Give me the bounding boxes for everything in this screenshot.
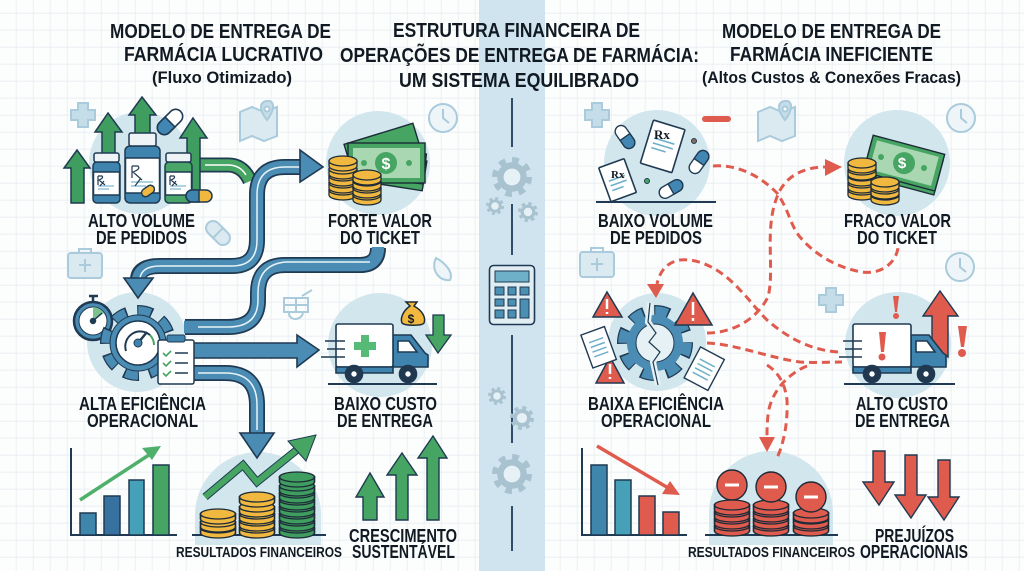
- icon: calculator: [490, 266, 534, 324]
- left decorative icons: [68, 101, 457, 319]
- label: prejuizos: OPERACIONAIS: [860, 542, 968, 562]
- icon: minus: [702, 116, 731, 122]
- title: right: [702, 21, 961, 87]
- icon: red up arrow: [923, 291, 958, 357]
- arrow: ticket to efficiency: [184, 247, 378, 327]
- arrowheads: [647, 159, 842, 452]
- title: right: FARMÁCIA INEFICIENTE: [730, 43, 933, 66]
- label: crescimento: SUSTENTÁVEL: [352, 541, 455, 562]
- right decorative icons: [580, 101, 975, 312]
- label: fraco valor: FRACO VALOR: [844, 211, 951, 231]
- icon: delivery truck: [321, 324, 437, 384]
- label: alto volume: ALTO VOLUME: [88, 211, 195, 231]
- light circles right: [604, 110, 951, 545]
- chart: falling bars: [582, 446, 687, 535]
- icon: exclamation marks: [878, 296, 967, 360]
- label: prejuizos: [860, 525, 968, 562]
- label: alta eficiencia: [79, 393, 206, 431]
- label: alto custo: ALTO CUSTO: [856, 394, 948, 414]
- title: center: [340, 20, 699, 92]
- arrow: green flow: [198, 165, 250, 181]
- icon: prescriptions and pills: [596, 120, 716, 202]
- icon: documents: [581, 327, 724, 390]
- icon: gears top: [488, 161, 536, 220]
- title: center: ESTRUTURA FINANCEIRA DE: [393, 20, 640, 42]
- label: alta eficiencia: ALTA EFICIÊNCIA: [79, 393, 206, 414]
- label: alto custo: DE ENTREGA: [855, 411, 950, 431]
- warning marks: [607, 299, 693, 379]
- label: forte valor: DO TICKET: [340, 228, 420, 248]
- label: fraco valor: DO TICKET: [857, 228, 937, 248]
- icon: growth arrows: [356, 436, 447, 520]
- icon: growth arrows behind bottles: [64, 97, 207, 203]
- title: left: (Fluxo Otimizado): [152, 68, 292, 87]
- icon: coin stacks and trend: [192, 435, 326, 538]
- title: left: MODELO DE ENTREGA DE: [110, 21, 331, 43]
- icon: warning triangles: [593, 292, 712, 383]
- icon: tilted money and coins: [848, 135, 945, 205]
- text: $: [382, 156, 391, 173]
- label: baixa eficiencia: OPERACIONAL: [601, 411, 711, 431]
- text: Rx: [611, 169, 625, 181]
- icon: stopwatch: [74, 296, 112, 340]
- icon: money and coins: [329, 123, 427, 205]
- title: center: OPERAÇÕES DE ENTREGA DE FARMÁCIA:: [340, 43, 699, 67]
- label: baixo volume: DE PEDIDOS: [610, 228, 702, 248]
- label: forte valor: FORTE VALOR: [328, 211, 432, 231]
- icon: clipboard: [158, 335, 194, 384]
- label: alto volume: DE PEDIDOS: [96, 228, 187, 248]
- icon: money bag: [401, 302, 425, 326]
- arrow: efficiency to results: [190, 373, 274, 458]
- label: crescimento: [349, 526, 457, 562]
- text: Rx: [654, 127, 670, 142]
- label: baixa eficiencia: [588, 393, 724, 431]
- title: left: FARMÁCIA LUCRATIVO: [124, 43, 323, 66]
- light circles left: [87, 111, 432, 545]
- label: baixo custo: DE ENTREGA: [337, 411, 433, 431]
- dashed red connections: [657, 166, 898, 458]
- icon: green down arrow: [426, 315, 451, 353]
- label: crescimento: CRESCIMENTO: [349, 526, 457, 546]
- title: right: (Altos Custos & Conexões Fracas): [702, 68, 961, 87]
- title: left: [110, 21, 331, 87]
- title: right: MODELO DE ENTREGA DE: [722, 21, 941, 43]
- icon: medicine bottles: [93, 106, 212, 203]
- icon: delivery truck red: [839, 324, 955, 384]
- label: alta eficiencia: OPERACIONAL: [87, 411, 198, 431]
- icon: red down arrows: [863, 451, 959, 520]
- label: baixo custo: BAIXO CUSTO: [334, 394, 437, 414]
- label: alto custo: [855, 394, 950, 431]
- title: center: UM SISTEMA EQUILIBRADO: [399, 70, 639, 92]
- label: alto volume: [88, 211, 195, 248]
- icon: money bag: $: [408, 312, 415, 326]
- central divider band: [479, 0, 545, 571]
- icon: red coins: [705, 470, 838, 536]
- label: fraco valor: [844, 211, 951, 248]
- icon: gears bottom: [490, 389, 532, 490]
- chart: growing bars: [71, 446, 177, 535]
- icon: broken gear: [624, 303, 686, 385]
- label: baixo volume: [598, 211, 713, 248]
- label: prejuizos: PREJUÍZOS: [875, 525, 954, 546]
- text: $: [898, 155, 907, 172]
- label: forte valor: [328, 211, 432, 248]
- label: baixo volume: BAIXO VOLUME: [598, 211, 713, 231]
- label: resultados right: RESULTADOS FINANCEIROS: [688, 545, 855, 561]
- label: resultados left: RESULTADOS FINANCEIROS: [176, 545, 342, 561]
- arrow: efficiency to delivery cost: [190, 335, 319, 367]
- icon: gear with gauge: [107, 312, 169, 374]
- label: baixo custo: [334, 394, 437, 431]
- label: baixa eficiencia: BAIXA EFICIÊNCIA: [588, 393, 724, 414]
- arrow: volume to ticket and efficiency: [124, 150, 323, 298]
